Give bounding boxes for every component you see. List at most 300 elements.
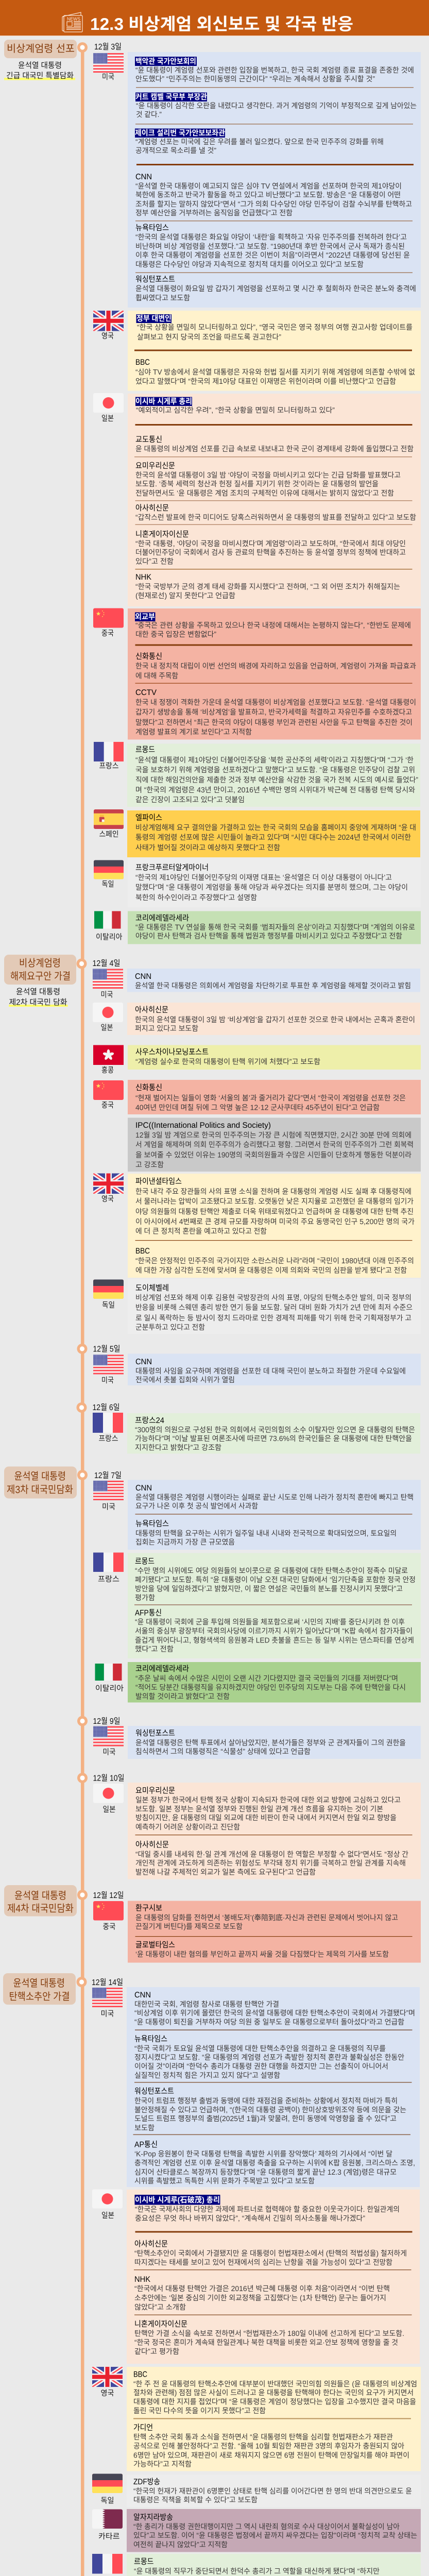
statement: 이시바 시게루	[135, 2195, 400, 2223]
report: AP통신: 심지어 산타클로스 복장까지 등장했다”며 “윤 대통령의 짧게 끝난 12.3 (계엄)령은 대규모	[134, 2168, 397, 2177]
panel: 중국 12월 3일	[128, 608, 421, 740]
statement: 정부 대변인: “한국 상황을 면밀히 모니터링하고 있다”, “영국 국민은 영국 정부의 여행 권고사항 업데이트를	[137, 324, 413, 332]
panel: 독일 12월 4일: 군분투하고 있다고 전함	[135, 1324, 205, 1332]
milestone: 윤석열 대통령 제3차 대국민담화: 윤석열 대통령	[14, 1471, 66, 1482]
panel: 일본 12월 10일	[128, 1783, 421, 1879]
report: CNN: “윤석열 한국 대통령이 예고되지 않은 심야 TV 연설에서 계엄을 선포하며 한국의 제1야당이	[135, 182, 402, 191]
timeline node: 12월 9일	[77, 1716, 88, 1726]
report: NHK: 않았다”고 소개함	[134, 2303, 186, 2312]
report: 르몽드: 르몽드	[135, 745, 155, 754]
panel: 이탈리아 12월 7일	[128, 1662, 421, 1702]
report: 신화통신	[135, 652, 416, 680]
report: 엘파이스: 엘파이스	[135, 814, 162, 822]
report: 가디언: 탄핵 소추안 국회 통과 소식을 전하면서 “윤 대통령의 탄핵을 심리할 헌법재판소가 재판관	[133, 2433, 393, 2442]
label: 독일	[102, 880, 114, 889]
report: 프랑크푸르터알게마이너: 프랑크푸르터알게마이너	[135, 863, 209, 872]
timeline node: 12월 10일	[77, 1773, 88, 1783]
icon: Japan flag	[93, 1784, 124, 1803]
timeline node: 12월 7일	[77, 1470, 88, 1480]
report: CCTV: CCTV	[135, 688, 157, 697]
milestone: 윤석열 대통령 탄핵소추안 가결	[3, 1973, 76, 2005]
report: 파이낸셜타임스: 에 더 큰 정치적 혼란을 예고하고 있다고 전함	[135, 1227, 267, 1235]
report: BBC: “한 주 전 윤 대통령의 탄핵소추안에 대부분이 반대했던 국민의힘 의원들은 (윤 대통령의 비상계엄	[133, 2380, 417, 2388]
report: 뉴욕타임스: 대통령은 다수당인 야당과 지속적으로 정치적 대치를 이어오고 있다”고 보도함	[135, 261, 364, 269]
label: 중국	[103, 1923, 116, 1931]
panel: 중국 12월 4일: “현재 벌어지는 일들이 영화 ‘서울의 봄’과 줄거리가 같다”면서 “한국이 계엄령을 선포한 것은	[135, 1094, 406, 1103]
report: 신화통신: 에 대해 주목함	[135, 672, 178, 680]
date: 12월 7일	[94, 1471, 122, 1480]
statement: 이시바 시게루: “예외적이고 심각한 우려”, “한국 상황을 면밀히 모니터링하고 있다”	[136, 406, 335, 415]
label: 스페인	[99, 830, 118, 839]
report: 뉴욕타임스: 뉴욕타임스	[135, 224, 169, 232]
panel: 프랑스 12월 6일: 지지한다고 밝혔다”고 강조함	[135, 1444, 221, 1452]
label: 프랑스	[98, 1575, 119, 1584]
report: 코리에레델라세라: 야당이 판사 탄핵과 검사 탄핵을 통해 법원과 행정부를 마비시키고 있다고 주장했다”고 전함	[135, 933, 402, 941]
report: BBC: “심야 TV 방송에서 윤석열 대통령은 자유와 헌법 질서를 지키기 위해 계엄령에 의존할 수밖에 없	[135, 368, 415, 377]
header banner	[0, 0, 429, 36]
report: CNN: “비상계엄 이후 위기에 몰렸던 한국의 윤석열 대통령에 대한 탄핵소추안이 국회에서 가결됐다”며	[134, 2009, 415, 2018]
report: 엘파이스: 사태가 벌어질 것이라고 예상하지 못했다”고 전함	[135, 844, 280, 852]
panel: 독일 12월 3일	[128, 858, 421, 907]
panel: 이탈리아 12월 7일: 발의할 것이라고 밝혔다”고 전함	[135, 1692, 230, 1701]
panel: 프랑스 12월 14일: “윤 대통령의 직무가 중단되면서 한덕수 총리가 그 역할을 대신하게 됐다”며 “하지만	[134, 2567, 380, 2576]
panel: 이탈리아 12월 7일: “추운 날씨 속에서 수많은 시민이 오랜 시간 기다렸지만 결국 국민들의 기대를 저버렸다”며	[135, 1674, 398, 1683]
statement: 제이크 설리번: 공개적으로 목소리를 낼 것”	[135, 147, 216, 155]
report: 워싱턴포스트: 불안정해질 수 있다고 언급하며, “(한국의 대통령 공백이) 한미상호방위조약 등에 의문을 갖는	[134, 2106, 406, 2114]
panel: IPC	[128, 1118, 421, 1172]
milestone: 비상계엄령 선포: 비상계엄령 선포	[7, 43, 75, 55]
panel: 미국 12월 9일: 침식하면서 그의 대통령직은 “식물성” 상태에 있다고 언급함	[135, 1748, 311, 1756]
panel: 카타르 12월 14일	[127, 2509, 421, 2552]
statement: 제이크 설리번	[135, 129, 384, 155]
report: 르몽드: 직에 대한 해임건의안을 제출한 것과 정부 예산안을 삭감한 것을 국가 전복 시도의 예시로 들었다”	[135, 776, 418, 784]
report: CNN: 북한에 동조하고 반국가 활동을 하고 있다고 비난했다”고 보도함. 방송은 “윤 대통령이 어떤	[135, 191, 401, 199]
icon: newspaper: NEWS	[67, 16, 80, 22]
icon: US flag	[93, 53, 124, 73]
label: 미국	[101, 990, 113, 999]
panel: 이탈리아 12월 3일	[128, 911, 421, 944]
report: 르몽드: “수만 명의 시위에도 여당 의원들의 보이콧으로 윤 대통령에 대한 탄핵소추안이 정족수 미달로	[135, 1567, 408, 1575]
statement: 제이크 설리번: 제이크 설리번 국가안보보좌관	[135, 129, 225, 138]
panel: 카타르 12월 14일: 알자지라방송	[133, 2513, 173, 2522]
report: BBC: BBC	[135, 358, 150, 367]
milestone note	[4, 61, 75, 80]
icon: France flag	[94, 742, 124, 761]
milestone note: 윤석열 대통령	[16, 988, 60, 996]
report: 르몽드	[135, 1557, 416, 1602]
report: BBC: BBC	[135, 1247, 150, 1256]
panel: 프랑스 12월 6일: 프랑스24	[135, 1416, 164, 1425]
report: AP통신	[134, 2140, 415, 2185]
report: NHK	[134, 2275, 390, 2312]
label: 일본	[101, 1023, 113, 1032]
timeline node: 12월 3일	[77, 42, 88, 53]
panel: 미국 12월 9일	[128, 1726, 421, 1759]
report: 가디언	[133, 2424, 409, 2469]
report: 뉴욕타임스: 집회는 지금까지 가장 큰 규모였음	[135, 1538, 235, 1547]
report: AP통신: 시위를 촉발했고 독특한 시위 문화가 주목받고 있다”고 보도함	[134, 2177, 315, 2185]
panel: 일본 12월 4일: 아사히신문	[135, 1006, 168, 1014]
report: BBC	[133, 2370, 417, 2415]
report: 뉴욕타임스: “한국의 윤석열 대통령은 화요일 야당이 ‘내란’을 획책하고 ‘자유 민주주의를 전복하려 한다’고	[135, 233, 407, 242]
icon: Japan flag	[93, 393, 124, 413]
label: 미국	[102, 73, 114, 81]
statement: 커트 캠벨	[135, 93, 417, 119]
panel: IPC: 을 보여줄 수 있었던 이유는 190명의 국회의원들과 수많은 시민들이 단호하게 행동한 덕분이라	[135, 1151, 411, 1159]
report: 코리에레델라세라: 코리에레델라세라	[135, 914, 189, 923]
report: 뉴욕타임스: 이후 한국 대통령이 계엄령을 선포한 것은 이번이 처음”이라면서 “2022년 대통령에 당선된 윤	[135, 251, 410, 260]
panel: 프랑스 12월 7일	[128, 1553, 421, 1658]
panel: 중국 12월 12일	[128, 1901, 421, 1963]
milestone: 윤석열 대통령 탄핵소추안 가결: 탄핵소추안 가결	[9, 1991, 70, 2003]
panel: 미국 12월 5일	[128, 1354, 421, 1385]
report: 니혼게이자이신문	[135, 530, 406, 566]
icon: France flag	[93, 1553, 124, 1572]
label: 독일	[102, 1301, 115, 1310]
panel: 미국 12월 9일: 워싱턴포스트	[135, 1729, 175, 1738]
report: AFP통신: “윤 대통령이 국회에 군을 투입해 의원들을 체포함으로써 ‘시민의 지배’를 중단시키려 한 이후	[135, 1618, 405, 1626]
report: 교도통신	[135, 435, 414, 453]
statement: 백악관: 백악관 국가안보회의	[135, 57, 196, 66]
report: CCTV	[135, 688, 416, 737]
report: 요미우리신문: 한국의 윤석열 대통령이 3일 밤 ‘야당이 국정을 마비시키고 있다’는 긴급 담화를 발표했다고	[135, 471, 401, 480]
report: 아사히신문: “탄핵소추안이 국회에서 가결됐지만 윤 대통령이 헌법재판소에서 (탄핵의 적법성을) 철저하게	[134, 2249, 407, 2258]
icon: Germany flag	[94, 860, 124, 879]
report: 르몽드: 폐기됐다”고 보도함. 특히 “윤 대통령이 이날 오전 대국민 담화에서 ‘임기단축을 포함한 정국 안정	[135, 1576, 416, 1584]
panel: 미국 12월 7일	[128, 1480, 421, 1550]
report: AP통신: ‘K-Pop 응원봉이 한국 대통령 탄핵을 촉발한 시위를 장악했다’ 제하의 기사에서 “이번 달	[134, 2150, 392, 2159]
panel: 미국 12월 5일: 대통령의 사임을 요구하며 계엄령을 선포한 데 대해 국민이 분노하고 좌절한 가운데 수요일에	[135, 1367, 406, 1376]
icon: China flag	[93, 608, 124, 628]
panel: 프랑스 12월 14일	[127, 2554, 421, 2576]
timeline line	[81, 47, 84, 2576]
report: 파이낸셜타임스: 파이낸셜타임스	[135, 1177, 182, 1186]
label: 영국	[101, 2389, 114, 2398]
panel: 홍콩 12월 4일	[128, 1045, 421, 1070]
report: NHK: NHK	[135, 573, 152, 582]
report: CCTV: 한국 내 정쟁이 격화한 가운데 윤석열 대통령이 비상계엄을 선포했다고 보도함. “윤석열 대통령이	[135, 699, 416, 707]
milestone note: 윤석열 대통령	[18, 61, 62, 70]
panel: 카타르 12월 14일: “한 총리가 대통령 권한대행이지만 그 역시 내란죄 혐의로 수사 대상이어서 불확실성이 남아	[133, 2522, 400, 2531]
report: 니혼게이자이신문: 더불어민주당이 국회에서 검사 등 관료의 탄핵을 추진하는 등 윤석열 정부의 정책에 반대하고	[135, 549, 406, 557]
milestone: 비상계엄령 해제요구안 가결	[4, 955, 76, 1007]
statement: 외교부: “중국은 관련 상황을 주목하고 있으나 한국 내정에 대해서는 논평하지 않는다”, “한반도 문제에	[135, 621, 411, 630]
statement: 외교부	[135, 612, 411, 639]
report: 뉴욕타임스: 실질적인 정치적 힘은 가지고 있지 않다”고 설명함	[134, 2072, 280, 2080]
label: 카타르	[98, 2532, 120, 2541]
report: 워싱턴포스트: 워싱턴포스트	[135, 275, 175, 284]
report: 아사히신문: 발전해 나갈 주체적인 외교가 일본 측에도 요구된다”고 언급함	[135, 1868, 316, 1876]
label: 미국	[102, 1502, 115, 1512]
panel: 미국 12월 4일: CNN	[135, 972, 151, 981]
report: 글로벌타임스: 글로벌타임스	[135, 1941, 175, 1950]
report: 니혼게이자이신문: “한국 대통령, ‘야당이 국정을 마비시켰다’며 계엄령”이라고 보도하며, “한국에서 최대 야당인	[135, 540, 406, 548]
panel: 독일 12월 4일: 로 일시 폭락하는 등 밤사이 정치 드라마로 인한 경제적 피해를 막기 위해 한국 기획재정부가 고	[135, 1314, 411, 1323]
report: 르몽드: 평가함	[135, 1594, 155, 1602]
report: NHK: NHK	[134, 2275, 151, 2284]
report: BBC: 절차와 관련해) 점점 많은 사실이 드러나고 윤 대통령을 탄핵해야 한다는 국민의 요구가 커지면서	[133, 2389, 414, 2397]
panel: 프랑스 12월 6일: 가능하다”며 “이날 발표된 여론조사에 따르면 73.6%의 한국인들은 윤 대통령에 대한 탄핵안을	[135, 1435, 412, 1443]
report: 워싱턴포스트	[134, 2087, 406, 2132]
report: 요미우리신문: 예측하기 어려운 상황이라고 진단함	[135, 1823, 240, 1832]
report: 뉴욕타임스	[135, 224, 410, 269]
panel: 프랑스 12월 6일	[127, 1413, 420, 1454]
milestone: 윤석열 대통령 제4차 대국민담화	[4, 1885, 77, 1917]
report: 파이낸셜타임스: 이 아시아에서 4번째로 큰 경제 규모를 자랑하며 미국의 주요 동맹국인 인구 5,200만 명의 국가	[135, 1218, 415, 1226]
report: CNN: 대한민국 국회, 계엄령 참사로 대통령 탄핵안 가결	[134, 2001, 279, 2009]
panel: 프랑스 12월 6일: “300명의 의원으로 구성된 한국 의회에서 국민의힘의 소수 이탈자만 있으면 윤 대통령의 탄핵은	[135, 1426, 415, 1434]
report: 뉴욕타임스: 이어질 것”이라며 “한덕수 총리가 대통령 권한 대행을 하겠지만 그는 선출직이 아니어서	[134, 2063, 388, 2071]
report: NHK: “한국에서 대통령 탄핵안 가결은 2016년 박근혜 대통령 이후 처음”이라면서 “이번 탄핵	[134, 2285, 390, 2293]
icon: China flag	[93, 1901, 124, 1921]
report: 가디언: 가디언	[133, 2424, 153, 2432]
date: 12월 10일	[93, 1773, 125, 1783]
label: 일본	[101, 2211, 114, 2220]
report: 교도통신: 윤 대통령의 비상계엄 선포를 긴급 속보로 내보내고 한국 군이 경계태세 강화에 돌입했다고 전함	[135, 445, 414, 453]
report: 니혼게이자이신문: 같다”고 평가함	[134, 2348, 179, 2356]
milestone: 윤석열 대통령 제4차 대국민담화: 윤석열 대통령	[14, 1890, 66, 1902]
report: 파이낸셜타임스: 서 물러나라는 압박이 고조됐다고 보도함. 오랫동안 낮은 지지율로 고전했던 윤 대통령의 임기가	[135, 1197, 414, 1206]
report: 르몽드: 같은 긴장이 고조되고 있다”고 덧붙임	[135, 796, 245, 804]
report: CNN: CNN	[134, 1991, 151, 1999]
report: 워싱턴포스트: 한국이 트럼프 행정부 출범과 동맹에 대한 재점검을 준비하는 상황에서 정치적 마비가 특히	[134, 2097, 398, 2105]
panel: 미국 12월 5일: CNN	[135, 1358, 152, 1366]
report: 르몽드	[135, 745, 418, 804]
panel: 미국 12월 9일: 윤석열 대통령은 탄핵 투표에서 살아남았지만, 분석가들은 정부와 군 관계자들이 그의 권한을	[135, 1739, 406, 1748]
panel: 미국 12월 3일	[128, 52, 421, 308]
report: 교도통신: 교도통신	[135, 435, 162, 444]
panel: 일본 12월 4일: 한국의 윤석열 대통령이 3일 밤 ‘비상계엄’을 갑자기 선포한 것으로 한국 내에서는 곤혹과 혼란이	[135, 1015, 415, 1024]
report: 뉴욕타임스	[134, 2035, 404, 2080]
panel: 독일 12월 14일: “한국의 헌재가 재판관이 6명뿐인 상태로 탄핵 심리를 이어간다면 한 명의 반대 의견만으로도 윤	[133, 2487, 412, 2496]
icon: Hong Kong flag	[93, 1045, 124, 1065]
panel: 중국 12월 4일	[128, 1080, 421, 1114]
milestone: 윤석열 대통령 제3차 대국민담화: 제3차 대국민담화	[7, 1484, 73, 1496]
date: 12월 5일	[93, 1345, 121, 1354]
panel: 중국 12월 4일: 신화통신	[135, 1083, 162, 1092]
panel: 카타르 12월 14일: 여전히 끝나지 않았다”고 지적함	[133, 2541, 228, 2549]
report: CNN	[135, 1484, 414, 1511]
report: NHK: 소추안에는 ‘일본 중심의 기이한 외교정책을 고집했다’는 (1차 탄핵안) 문구는 들어가지	[134, 2294, 386, 2302]
date: 12월 14일	[92, 1978, 123, 1987]
icon: Japan flag	[92, 2190, 123, 2208]
statement: 정부 대변인: 살펴보고 현지 당국의 조언을 따르도록 권고한다”	[137, 333, 281, 342]
label: 일본	[103, 1805, 115, 1814]
panel: 미국 12월 4일	[127, 969, 420, 992]
report: 워싱턴포스트: 워싱턴포스트	[134, 2087, 174, 2096]
report: 아사히신문: 개인적 관계에 과도하게 의존하는 위험성도 부각돼 정치 위기를 극복하고 한일 관계를 지속해	[135, 1859, 406, 1868]
report: 환구시보: 끈질기게 버틴다)를 제목으로 보도함	[135, 1923, 243, 1931]
panel: 일본 12월 4일: 퍼지고 있다고 보도함	[135, 1025, 198, 1033]
report: 아사히신문: “대일 중시를 내세워 한·일 관계 개선에 윤 대통령이 한 역할은 부정할 수 없다”면서도 “정상 간	[135, 1850, 408, 1859]
report: NHK: (현재로선) 알지 못한다”고 언급함	[135, 592, 235, 600]
statement: 커트 캠벨: “윤 대통령이 심각한 오판을 내렸다고 생각한다. 과거 계엄령의 기억이 부정적으로 깊게 남아있는	[136, 102, 417, 110]
panel: 독일 12월 4일: 비상계엄 선포와 해제 이후 김용현 국방장관의 사의 표명, 야당의 탄핵소추안 발의, 미국 정부의	[135, 1294, 411, 1302]
timeline node: 12월 12일	[77, 1890, 88, 1900]
report: 엘파이스	[135, 814, 416, 852]
report: AP통신: 충격적인 계엄령 선포 이후 윤석열 대통령 축출을 요구하는 시위에 K팝 응원봉, 크리스마스 조명,	[134, 2159, 415, 2167]
report: BBC: 대통령에 대한 지지를 접었다”며 “윤 대통령은 계엄이 정당했다는 입장을 고수했지만 결국 마음을	[133, 2398, 416, 2406]
report: NHK: “한국 국방부가 군의 경계 태세 강화를 지시했다”고 전하며, “그 외 어떤 조치가 취해질지는	[135, 583, 400, 591]
report: CCTV: 갑자기 생방송을 통해 ‘비상계엄’을 발표하고, 반국가세력을 척결하고 자유민주를 수호하겠다고	[135, 708, 412, 717]
label: 미국	[103, 1748, 116, 1757]
panel: 카타르 12월 14일: 있다”고 보도함. 이어 “윤 대통령은 법정에서 끝까지 싸우겠다는 입장”이라며 “정치적 교착 상태는	[133, 2532, 417, 2540]
report: BBC	[135, 1247, 414, 1275]
report: 프랑크푸르터알게마이너: 북한의 하수인이라고 주장했다”고 설명함	[135, 894, 257, 902]
report: 아사히신문	[135, 1840, 408, 1876]
statement: 백악관: “윤 대통령이 계엄령 선포와 관련한 입장을 번복하고, 한국 국회 계엄령 종료 표결을 존중한 것에	[135, 66, 414, 75]
report: 엘파이스: 비상계엄해제 요구 결의안을 가결하고 있는 한국 국회의 모습을 홈페이지 중앙에 게재하며 “윤 대	[135, 823, 416, 832]
report: CNN: 요구가 나온 이후 첫 공식 발언에서 사과함	[135, 1502, 258, 1511]
label: 중국	[101, 629, 114, 638]
report: 르몽드: 국을 보호하기 위해 계엄령을 선포하겠다’고 말했다”고 보도함. “윤 대통령은 민주당이 검찰 고위	[135, 766, 415, 774]
report: 니혼게이자이신문	[134, 2320, 404, 2356]
report: 니혼게이자이신문: “한국 정국은 혼미가 계속돼 한일관계나 북한 대책을 비롯한 외교·안보 정책에 영향을 줄 것	[134, 2338, 398, 2347]
report: 뉴욕타임스: 정지시켰다”고 보도함. “윤 대통령의 계엄령 선포가 촉발한 정치적 혼란과 불확실성은 한동안	[134, 2053, 404, 2062]
label: 일본	[101, 414, 114, 423]
report: 엘파이스: 통령의 계엄령 선포에 많은 시민들이 놀라고 있다”며 “시민 대다수는 2024년 한국에서 이러한	[135, 834, 411, 842]
timeline node: 12월 4일	[76, 958, 87, 969]
report: BBC: BBC	[133, 2370, 147, 2379]
report: 코리에레델라세라	[135, 914, 415, 941]
report: CNN	[134, 1991, 415, 2027]
icon: US flag	[92, 1988, 123, 2007]
statement: 이시바 시게루	[135, 397, 335, 415]
statement: 이시바 시게루: 이시바 시게루(石破茂) 총리	[135, 2196, 220, 2205]
report: 요미우리신문: 방침이지만, 윤 대통령의 대일 외교에 대한 비판이 한국 내에서 커지면서 한일 외교 향방을	[135, 1814, 397, 1822]
panel: 이탈리아 12월 7일: “적어도 당분간 대통령직을 유지하겠지만 야당인 민주당의 지도부는 다음 주에 탄핵안을 다시	[135, 1684, 406, 1692]
panel: 홍콩 12월 4일: 사우스차이나모닝포스트	[135, 1048, 209, 1057]
report: 뉴욕타임스: 뉴욕타임스	[134, 2035, 167, 2043]
report: 뉴욕타임스: 비난하며 비상 계엄령을 선포했다.”고 보도함. “1980년대 후반 한국에서 군사 독재가 종식된	[135, 243, 405, 251]
title: 12.3 비상계엄 외신보도 및 각국 반응	[90, 14, 353, 33]
report: CCTV: 계엄령 발표의 계기로 보인다”고 지적함	[135, 728, 252, 737]
milestone: 비상계엄령 해제요구안 가결: 비상계엄령	[19, 958, 61, 969]
report: 요미우리신문	[135, 1787, 401, 1832]
milestone note: 제2차 대국민 담화	[9, 998, 67, 1007]
milestone: 윤석열 대통령 제3차 대국민담화	[4, 1466, 77, 1498]
icon: Germany flag	[93, 1280, 124, 1299]
report: AFP통신	[135, 1608, 414, 1654]
label: 미국	[101, 2009, 114, 2019]
statement: 커트 캠벨: 것 같다.”	[136, 111, 162, 119]
report: 워싱턴포스트	[135, 275, 416, 302]
report: 파이낸셜타임스	[135, 1177, 415, 1235]
report: 뉴욕타임스: 대통령의 탄핵을 요구하는 시위가 일주일 내내 시내와 전국적으로 확대되었으며, 토요일의	[135, 1530, 397, 1538]
statement: 백악관	[135, 57, 414, 83]
icon: UK flag	[93, 311, 124, 331]
panel: 독일 12월 4일: 반응을 비롯해 스웨덴 총리 방한 연기 등을 보도함. 달러 대비 원화 가치가 2년 만에 최저 수준으	[135, 1303, 413, 1312]
report: 가디언: 공석으로 인해 불안정하다”고 전함. “올해 10월 퇴임한 재판관 3명의 후임자가 충원되지 않아	[133, 2442, 404, 2450]
report: 요미우리신문	[135, 462, 401, 498]
report: 르몽드: “윤석열 대통령이 제1야당인 더불어민주당을 ‘북한 공산주의 세력’이라고 지칭했다”며 “그가 ‘한	[135, 756, 414, 765]
report: CCTV: 말했다”고 전하면서 “최근 한국의 야당이 대통령 부인과 관련된 사안을 두고 탄핵을 추진한 것이	[135, 719, 413, 727]
statement: 정부 대변인	[136, 314, 413, 342]
report: AFP통신: 서울의 중심부 광장부터 국회의사당에 이르기까지 시위가 일어났다”며 “K팝 속에서 참가자들이	[135, 1627, 413, 1635]
date: 12월 12일	[93, 1891, 124, 1900]
report: 글로벌타임스: ‘윤 대통령이 내란 혐의를 부인하고 끝까지 싸울 것을 다짐했다’는 제목의 기사를 보도함	[135, 1950, 389, 1959]
timeline node: 12월 14일	[76, 1977, 87, 1987]
report: AFP통신: 했다”고 전함	[135, 1646, 174, 1654]
panel: 홍콩 12월 4일: “계엄령 실수로 한국의 대통령이 탄핵 위기에 처했다”고 보도함	[135, 1058, 320, 1066]
date: 12월 4일	[93, 959, 121, 968]
icon: Italy flag	[95, 1664, 122, 1681]
statement: 이시바 시게루: 중요성은 무엇 하나 바뀌지 않았다”, “계속해서 긴밀히 의사소통을 해나가겠다”	[135, 2214, 365, 2223]
label: 홍콩	[101, 1066, 114, 1075]
report: 신화통신: 한국 내 정치적 대립이 이번 선언의 배경에 자리하고 있음을 언급하며, 계엄령이 가져올 파급효과	[135, 663, 416, 671]
report: 아사히신문	[134, 2240, 407, 2267]
report: 요미우리신문: 보도함. 일본 정부는 윤석열 정부와 진행된 한일 관계 개선 흐름을 유지하는 것이 기본	[135, 1805, 383, 1814]
report: 파이낸셜타임스: 야당 의원들의 대통령 탄핵안 제출로 더욱 위태로워졌다고 언급하며 윤 대통령에 대한 탄핵 추진	[135, 1208, 414, 1216]
report: 환구시보: 윤 대통령의 담화를 전하면서 ‘봉배도저’(奉陪到底·자신과 관련된 문제에서 벗어나지 않고	[135, 1913, 398, 1922]
milestone: 윤석열 대통령 제4차 대국민담화: 제4차 대국민담화	[7, 1903, 74, 1914]
date: 12월 3일	[94, 42, 122, 52]
panel: 독일 12월 14일: 대통령은 직책을 회복할 수 있다”고 보도함	[133, 2496, 258, 2504]
report: AFP통신: AFP통신	[135, 1608, 162, 1618]
panel: IPC: 고 강조함	[135, 1161, 164, 1170]
report: 요미우리신문: 보도함. ‘종북 세력의 청산과 헌정 질서를 지키기 위한 것’이라는 윤 대통령의 발언을	[135, 480, 379, 488]
report: 아사히신문	[135, 504, 416, 522]
report: 르몽드: 르몽드	[135, 1557, 155, 1566]
statement: 이시바 시게루: 이시바 시게루 총리	[135, 397, 192, 406]
panel: 스페인 12월 3일	[127, 810, 420, 857]
icon: Japan flag	[93, 1003, 123, 1022]
icon: UK flag	[92, 2367, 123, 2387]
icon: Italy flag	[94, 911, 121, 928]
report: 요미우리신문: 전달하면서도 ‘윤 대통령은 계엄 조치의 구체적인 이유에 대해서는 밝히지 않았다’고 전함	[135, 489, 394, 498]
report: 프랑크푸르터알게마이너	[135, 863, 408, 902]
icon: US flag	[93, 1355, 124, 1375]
report: 가디언: 6명만 남아 있으며, 재판관이 새로 채워지지 않으면 6명 전원이 탄핵에 만장일치를 해야 파면이	[133, 2451, 409, 2460]
panel: 독일 12월 14일	[127, 2475, 421, 2507]
report: 아사히신문: 아사히신문	[135, 1840, 169, 1850]
report: 신화통신: 신화통신	[135, 652, 162, 661]
icon: China flag	[93, 1080, 124, 1100]
panel: 영국 12월 4일	[128, 1174, 421, 1278]
statement: 이시바 시게루: “한국은 국제사회의 다양한 과제에 파트너로 협력해야 할 중요한 이웃국가이다. 한일관계의	[135, 2205, 400, 2214]
milestone: 윤석열 대통령 탄핵소추안 가결: 윤석열 대통령	[13, 1978, 65, 1989]
panel: 미국 12월 4일: 윤석열 한국 대통령은 의회에서 계엄령을 차단하기로 투표한 후 계엄령을 해제할 것이라고 밝힘	[135, 981, 411, 990]
panel: 일본 12월 14일	[127, 2190, 420, 2364]
report: 니혼게이자이신문: 니혼게이자이신문	[134, 2320, 187, 2329]
label: 이탈리아	[95, 1684, 124, 1693]
icon: France flag	[93, 1413, 123, 1433]
panel: 독일 12월 4일	[128, 1279, 421, 1334]
milestone note: 긴급 대국민 특별담화	[6, 72, 74, 80]
icon: newspaper	[62, 12, 82, 32]
panel: 이탈리아 12월 7일: 코리에레델라세라	[135, 1665, 189, 1673]
report: 니혼게이자이신문: 있다”고 전함	[135, 557, 174, 566]
report: 프랑크푸르터알게마이너: “한국의 제1야당인 더불어민주당의 이재명 대표는 ‘윤석열은 더 이상 대통령이 아니다’고	[135, 874, 392, 882]
statement: 정부 대변인: 정부 대변인	[136, 314, 171, 323]
statement: 커트 캠벨: 커트 캠벨 국무부 부장관	[135, 93, 207, 101]
report: 니혼게이자이신문: 탄핵안 가결 소식을 속보로 전하면서 “헌법재판소가 180일 이내에 선고하게 된다”고 보도함.	[134, 2330, 404, 2338]
icon: France flag	[92, 2554, 123, 2574]
report: NHK	[135, 573, 400, 600]
report: CNN: 정부 예산안을 거부하려는 움직임을 언급했다”고 전함	[135, 209, 293, 217]
statement: 제이크 설리번: “계엄령 선포는 미국에 깊은 우려를 불러 일으켰다. 앞으로 한국 민주주의 강화를 위해	[135, 138, 384, 146]
statement: 백악관: 안도했다” “민주주의는 한미동맹의 근간이다” “우리는 계속해서 상황을 주시할 것”	[135, 75, 375, 83]
panel: 미국 12월 5일: 전국에서 촛불 집회와 시위가 열림	[135, 1376, 235, 1384]
report: 르몽드: 며 “한국의 계엄령은 43년 만이고, 2016년 수백만 명의 시위대가 박근혜 전 대통령 탄핵 당시와	[135, 786, 415, 794]
report: BBC: “한국은 안정적인 민주주의 국가이지만 소란스러운 나라”라며 “국민이 1980년대 이래 민주주의	[135, 1257, 414, 1265]
report: 프랑크푸르터알게마이너: 말했다”며 “윤 대통령이 계엄령을 통해 야당과 싸우겠다는 의지를 분명히 했으며, 그는 야당이	[135, 884, 408, 892]
milestone: 비상계엄령 해제요구안 가결: 해제요구안 가결	[10, 971, 71, 982]
label: 영국	[101, 332, 114, 341]
report: 워싱턴포스트: 윤석열 대통령이 화요일 밤 갑자기 계엄령을 선포하고 몇 시간 후 철회하자 한국은 분노와 충격에	[135, 285, 416, 293]
milestone note	[9, 988, 68, 1007]
label: 중국	[101, 1101, 114, 1110]
